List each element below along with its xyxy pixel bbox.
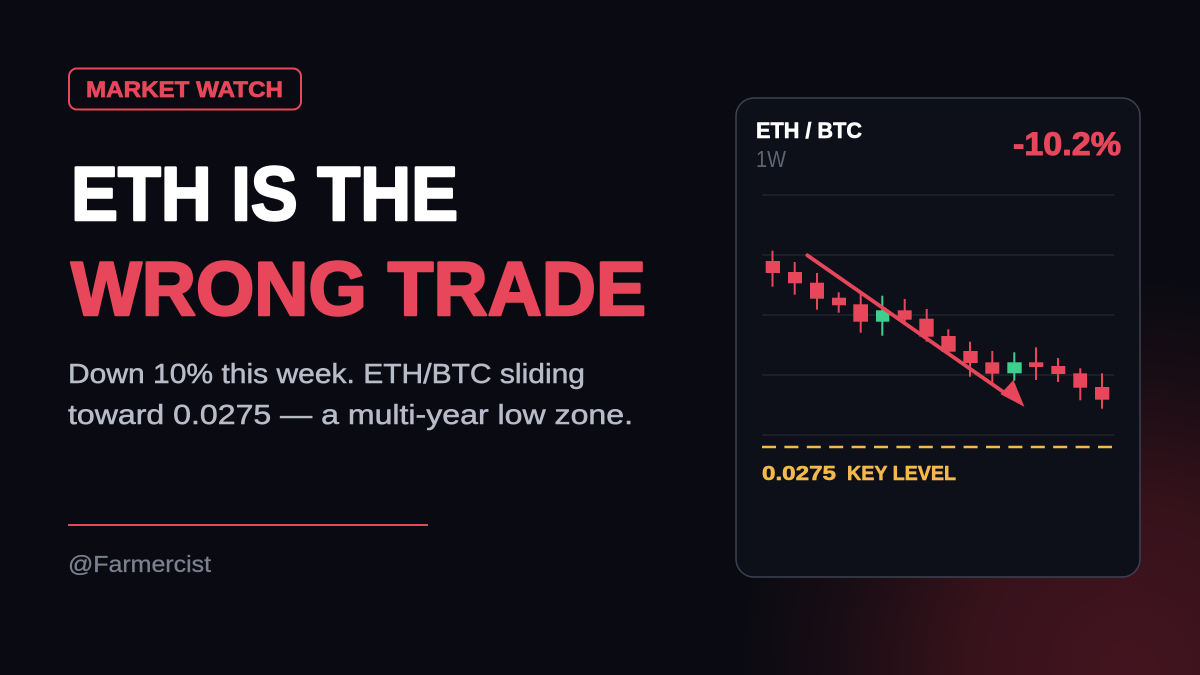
badge: market watch: MARKET WATCH bbox=[86, 77, 283, 102]
subtitle text: toward 0.0275 — a multi-year low zone. bbox=[68, 399, 633, 430]
key level label: 0.0275 bbox=[762, 462, 836, 485]
pair label: ETH / BTC bbox=[756, 118, 862, 143]
title: WRONG TRADE bbox=[71, 247, 646, 332]
timeframe label: 1W bbox=[756, 146, 786, 172]
author handle: @Farmercist bbox=[68, 551, 212, 577]
subtitle text bbox=[68, 358, 633, 430]
divider rule bbox=[68, 524, 428, 526]
key level dashed line bbox=[762, 446, 1114, 448]
key level label bbox=[762, 462, 956, 485]
badge: market watch bbox=[69, 68, 301, 110]
subtitle text: Down 10% this week. ETH/BTC sliding bbox=[68, 358, 585, 389]
key level label: KEY LEVEL bbox=[847, 462, 956, 485]
chart grid lines bbox=[762, 195, 1114, 435]
trend arrow bbox=[807, 255, 1024, 406]
panel: chart card bbox=[736, 98, 1140, 577]
percent change: -10.2% bbox=[1013, 126, 1121, 162]
title: ETH IS THE bbox=[71, 152, 458, 237]
title bbox=[71, 152, 646, 332]
candlestick chart bbox=[766, 251, 1109, 409]
